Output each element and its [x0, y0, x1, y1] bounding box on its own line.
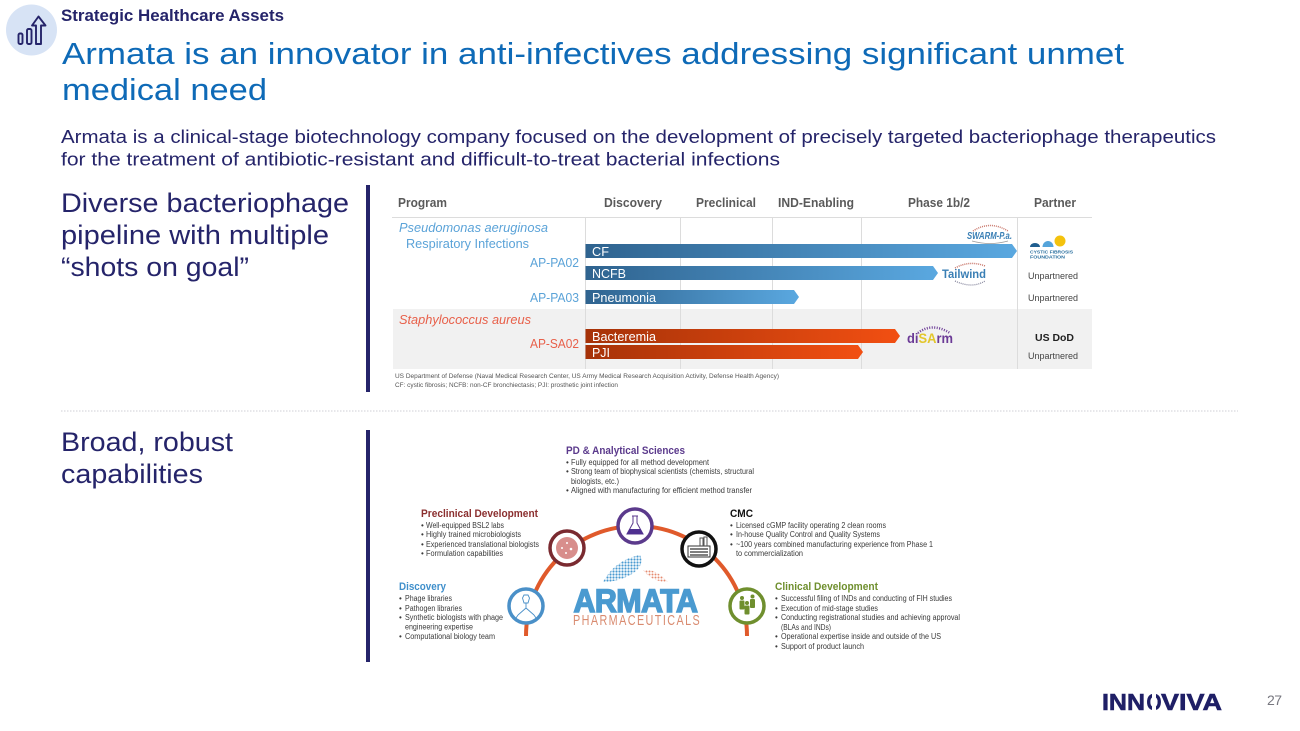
- logo: Innoviva: INN: [1102, 689, 1145, 715]
- subtitle: [61, 126, 1216, 170]
- logo: SWARM-P.a.: SWARM-P.a.: [967, 231, 1012, 242]
- logo: Innoviva: VIVA: [1161, 689, 1222, 715]
- bar: Pneumonia: [586, 290, 799, 305]
- group: Staphylococcus labels: [399, 313, 579, 351]
- block: Discovery: •: [399, 594, 402, 603]
- bar: NCFB: [586, 266, 938, 281]
- block: PD & Analytical Sciences: biologists, etc.): [571, 477, 619, 486]
- block: Preclinical Development: [421, 508, 539, 558]
- block: Preclinical Development: •: [421, 540, 424, 549]
- logo: Tailwind: Tailwind: [942, 267, 986, 281]
- chart column headers: [398, 196, 1076, 210]
- block: Discovery: engineering expertise: [405, 622, 473, 632]
- partner labels: Unpartnered: [1028, 271, 1078, 282]
- title: medical need: [62, 72, 267, 107]
- block: Discovery: Pathogen libraries: [405, 604, 462, 613]
- chart column headers: Preclinical: [696, 196, 756, 210]
- block: Clinical Development: •: [775, 642, 778, 651]
- heading: capabilities: capabilities: [61, 459, 203, 489]
- block: CMC: [730, 508, 933, 558]
- partner labels: Unpartnered: [1028, 293, 1078, 304]
- block: CMC: Licensed cGMP facility operating 2 clean rooms: [736, 521, 886, 530]
- heading: pipeline: pipeline with multiple: [61, 220, 329, 250]
- block: PD & Analytical Sciences: •: [566, 467, 569, 476]
- icon: factory: [682, 532, 716, 566]
- block: Preclinical Development: •: [421, 549, 424, 558]
- block: Preclinical Development: Formulation capabilities: [426, 549, 503, 558]
- block: Discovery: Phage libraries: [405, 594, 452, 603]
- logo: diSArm: diSArm: [907, 330, 953, 346]
- partner labels: US DoD: [1035, 332, 1074, 344]
- group: Staphylococcus labels: AP-SA02: [530, 337, 579, 351]
- block: CMC: ~100 years combined manufacturing experience from Phase 1: [736, 540, 933, 549]
- group: Pseudomonas labels: Respiratory Infections: [406, 237, 529, 251]
- block: CMC: In-house Quality Control and Quality Systems: [736, 530, 880, 539]
- bar: CF: [586, 244, 1017, 259]
- block: Clinical Development: [775, 581, 960, 651]
- bar: Bacteremia: [586, 329, 900, 344]
- icon: rising bar chart with arrow: [6, 4, 57, 56]
- logo: Innoviva: O: [1146, 689, 1162, 715]
- icon: people: [730, 589, 764, 623]
- logo: Armata Pharmaceuticals: PHARMACEUTICALS: [573, 611, 700, 628]
- accent bar: pipeline: [366, 185, 370, 392]
- section label: Strategic Healthcare Assets: [61, 7, 284, 25]
- heading: capabilities: Broad, robust: [61, 427, 234, 457]
- block: Preclinical Development: •: [421, 521, 424, 530]
- heading: pipeline: [61, 188, 349, 282]
- footnotes: US Department of Defense (Naval Medical Research Center, US Army Medical Research Acquisition Activity, Defense Health Agency): [395, 373, 779, 380]
- bar: Pneumonia: Pneumonia: [592, 290, 657, 305]
- partner labels: [1028, 271, 1078, 362]
- icon: phage: [509, 589, 543, 623]
- logo: Armata Pharmaceuticals: ARMATA: [574, 583, 698, 619]
- block: PD & Analytical Sciences: [566, 445, 754, 495]
- block: Preclinical Development: •: [421, 530, 424, 539]
- block: CMC: •: [730, 530, 733, 539]
- chart column headers: Program: [398, 196, 447, 210]
- title: [62, 36, 1124, 107]
- footnotes: [395, 373, 779, 389]
- block: PD & Analytical Sciences: Fully equipped for all method development: [571, 458, 710, 467]
- block: PD & Analytical Sciences: PD & Analytical Sciences: [566, 445, 685, 457]
- bar: PJI: [586, 345, 863, 360]
- arc connector: [526, 526, 747, 636]
- block: Discovery: Computational biology team: [405, 632, 495, 641]
- block: Preclinical Development: Highly trained microbiologists: [426, 530, 521, 539]
- logo: Cystic Fibrosis Foundation: CYSTIC FIBROSIS: [1030, 250, 1074, 256]
- bar: PJI: PJI: [592, 345, 610, 360]
- logo: SWARM-P.a.: [967, 226, 1012, 244]
- block: PD & Analytical Sciences: •: [566, 486, 569, 495]
- block: CMC: CMC: [730, 508, 753, 520]
- block: PD & Analytical Sciences: Strong team of biophysical scientists (chemists, structural: [571, 467, 754, 476]
- logo: Cystic Fibrosis Foundation: FOUNDATION: [1030, 254, 1066, 260]
- group: Staphylococcus labels: Staphylococcus aureus: [399, 313, 531, 327]
- logo: Innoviva: [1102, 689, 1222, 715]
- block: Clinical Development: Conducting registrational studies and achieving approval: [781, 613, 960, 622]
- footnotes: CF: cystic fibrosis; NCFB: non-CF bronchiectasis; PJI: prosthetic joint infection: [395, 382, 618, 389]
- group: Pseudomonas labels: AP-PA03: [530, 291, 579, 305]
- group: Pseudomonas labels: AP-PA02: [530, 256, 579, 270]
- chart column headers: Phase 1b/2: [908, 196, 970, 210]
- block: Preclinical Development: Preclinical Development: [421, 508, 538, 520]
- block: Clinical Development: •: [775, 613, 778, 622]
- block: Discovery: [399, 581, 503, 641]
- group: Pseudomonas labels: Pseudomonas aeruginosa: [399, 221, 548, 235]
- logo: Tailwind: [942, 263, 986, 285]
- page number: 27: [1267, 692, 1282, 708]
- block: Clinical Development: Execution of mid-stage studies: [781, 604, 878, 613]
- block: Clinical Development: Operational expertise inside and outside of the US: [781, 632, 941, 641]
- chart column headers: Discovery: [604, 196, 662, 210]
- accent bar: capabilities: [366, 430, 370, 662]
- logo: Cystic Fibrosis Foundation: [1030, 236, 1074, 260]
- bar: Bacteremia: Bacteremia: [592, 329, 657, 344]
- chart column headers: Partner: [1034, 196, 1076, 210]
- icon: flask: [618, 509, 652, 543]
- heading: capabilities: [61, 427, 234, 489]
- bar: CF: CF: [592, 244, 609, 259]
- heading: pipeline: Diverse bacteriophage: [61, 188, 349, 218]
- block: Preclinical Development: Well-equipped BSL2 labs: [426, 521, 504, 530]
- panel: pipeline chart: [392, 196, 1092, 389]
- block: Clinical Development: (BLAs and INDs): [781, 623, 831, 632]
- subtitle: Armata is a clinical-stage biotechnology company focused on the development of precisely targeted bacteriophage therapeutics: [61, 126, 1216, 147]
- block: Clinical Development: •: [775, 594, 778, 603]
- block: Discovery: Synthetic biologists with phage: [405, 613, 503, 622]
- block: Discovery: •: [399, 604, 402, 613]
- block: Discovery: •: [399, 632, 402, 641]
- partner labels: Unpartnered: [1028, 351, 1078, 362]
- block: CMC: •: [730, 540, 733, 549]
- title: Armata is an innovator in anti-infectives addressing significant unmet: [62, 36, 1124, 71]
- block: Clinical Development: •: [775, 632, 778, 641]
- bar: NCFB: NCFB: [592, 266, 626, 281]
- icon: petri dish: [550, 531, 584, 565]
- block: PD & Analytical Sciences: •: [566, 458, 569, 467]
- block: Preclinical Development: Experienced translational biologists: [426, 540, 539, 549]
- block: CMC: •: [730, 521, 733, 530]
- block: Clinical Development: Successful filing of INDs and conducting of FIH studies: [781, 594, 952, 603]
- block: Discovery: •: [399, 613, 402, 622]
- block: Clinical Development: Support of product launch: [781, 642, 864, 651]
- block: CMC: to commercialization: [736, 549, 803, 558]
- block: Discovery: Discovery: [399, 581, 447, 593]
- logo: Armata Pharmaceuticals: [573, 555, 700, 628]
- group: Pseudomonas labels: [399, 221, 579, 305]
- chart column headers: IND-Enabling: [778, 196, 854, 210]
- block: Clinical Development: Clinical Development: [775, 581, 878, 593]
- subtitle: for the treatment of antibiotic-resistant and difficult-to-treat bacterial infections: [61, 148, 780, 170]
- block: Clinical Development: •: [775, 604, 778, 613]
- panel: capabilities diagram: [399, 445, 960, 651]
- block: PD & Analytical Sciences: Aligned with manufacturing for efficient method transfer: [571, 486, 752, 495]
- heading: pipeline: “shots on goal”: [61, 252, 249, 282]
